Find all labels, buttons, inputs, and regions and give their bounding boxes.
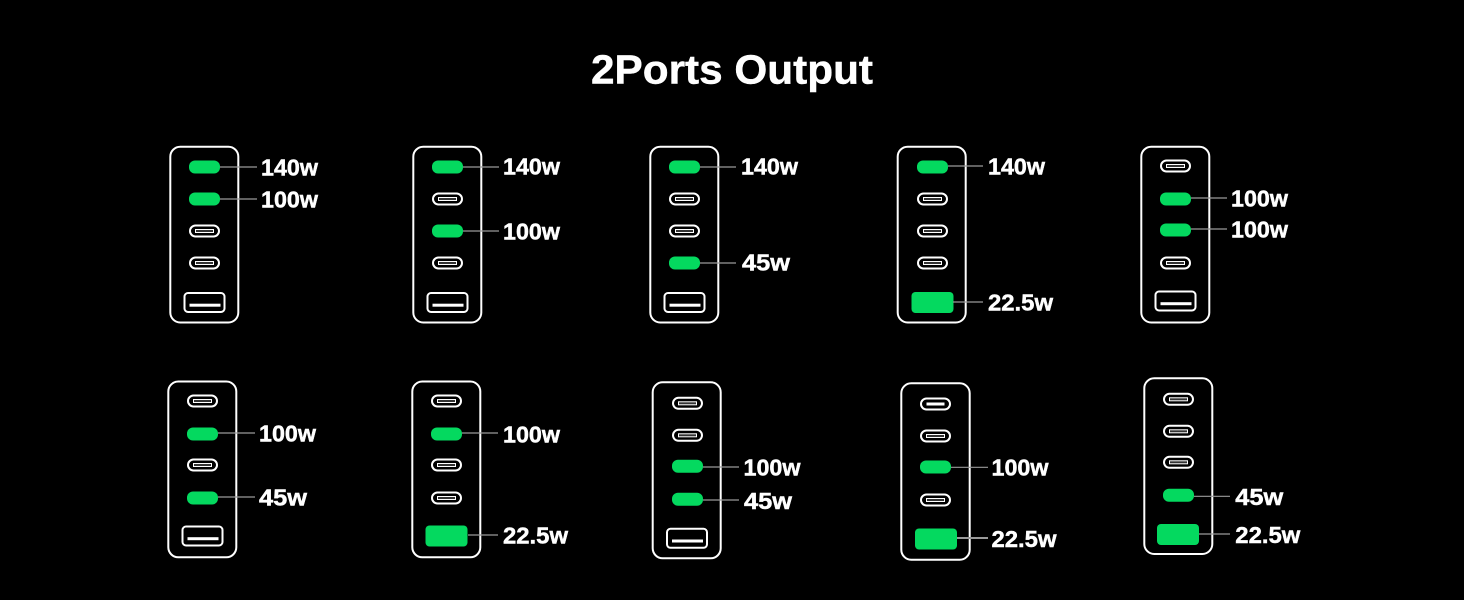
panel: 100w + 45w, ports 3 and 4: 45w <box>744 488 792 514</box>
panel: 100w + 45w, ports 3 and 4 <box>653 382 801 558</box>
panel: 140w + 45w <box>650 147 798 322</box>
panel: 140w + 100w: 100w <box>261 187 318 213</box>
panel: 140w + 100w, ports 1 and 3 <box>413 147 560 322</box>
panel: 100w + 22.5w, ports 3 and 5: 22.5w <box>992 526 1057 552</box>
panel: 100w + 100w <box>1141 147 1288 322</box>
panel: 140w + 45w: 45w <box>742 250 790 276</box>
panel: 140w + 100w: 140w <box>261 155 318 181</box>
panel: 100w + 22.5w: 22.5w <box>503 523 568 549</box>
panel: 140w + 100w, ports 1 and 3: 100w <box>503 219 560 245</box>
panel: 45w + 22.5w: 22.5w <box>1235 522 1300 548</box>
panel: 45w + 22.5w <box>1144 378 1300 554</box>
panel: 140w + 22.5w: 140w <box>988 154 1045 180</box>
panel: 140w + 100w <box>170 147 318 322</box>
panel: 100w + 22.5w, ports 3 and 5 <box>901 383 1057 560</box>
panel: 100w + 45w: 45w <box>259 485 307 511</box>
panel: 140w + 22.5w <box>898 147 1053 322</box>
panel: 140w + 22.5w: 22.5w <box>988 290 1053 316</box>
title: 2Ports Output <box>591 46 873 92</box>
panel: 140w + 45w: 140w <box>741 154 798 180</box>
panel: 100w + 45w, ports 3 and 4: 100w <box>744 454 801 480</box>
panel: 100w + 22.5w <box>412 382 568 557</box>
panel: 100w + 100w: 100w <box>1231 217 1288 243</box>
panel: 45w + 22.5w: 45w <box>1235 484 1283 510</box>
panel: 100w + 100w: 100w <box>1231 186 1288 212</box>
panel: 100w + 22.5w: 100w <box>503 422 560 448</box>
panel: 100w + 22.5w, ports 3 and 5: 100w <box>992 454 1049 480</box>
panel: 100w + 45w: 100w <box>259 421 316 447</box>
panel: 140w + 100w, ports 1 and 3: 140w <box>503 154 560 180</box>
panel: 100w + 45w <box>168 382 316 557</box>
